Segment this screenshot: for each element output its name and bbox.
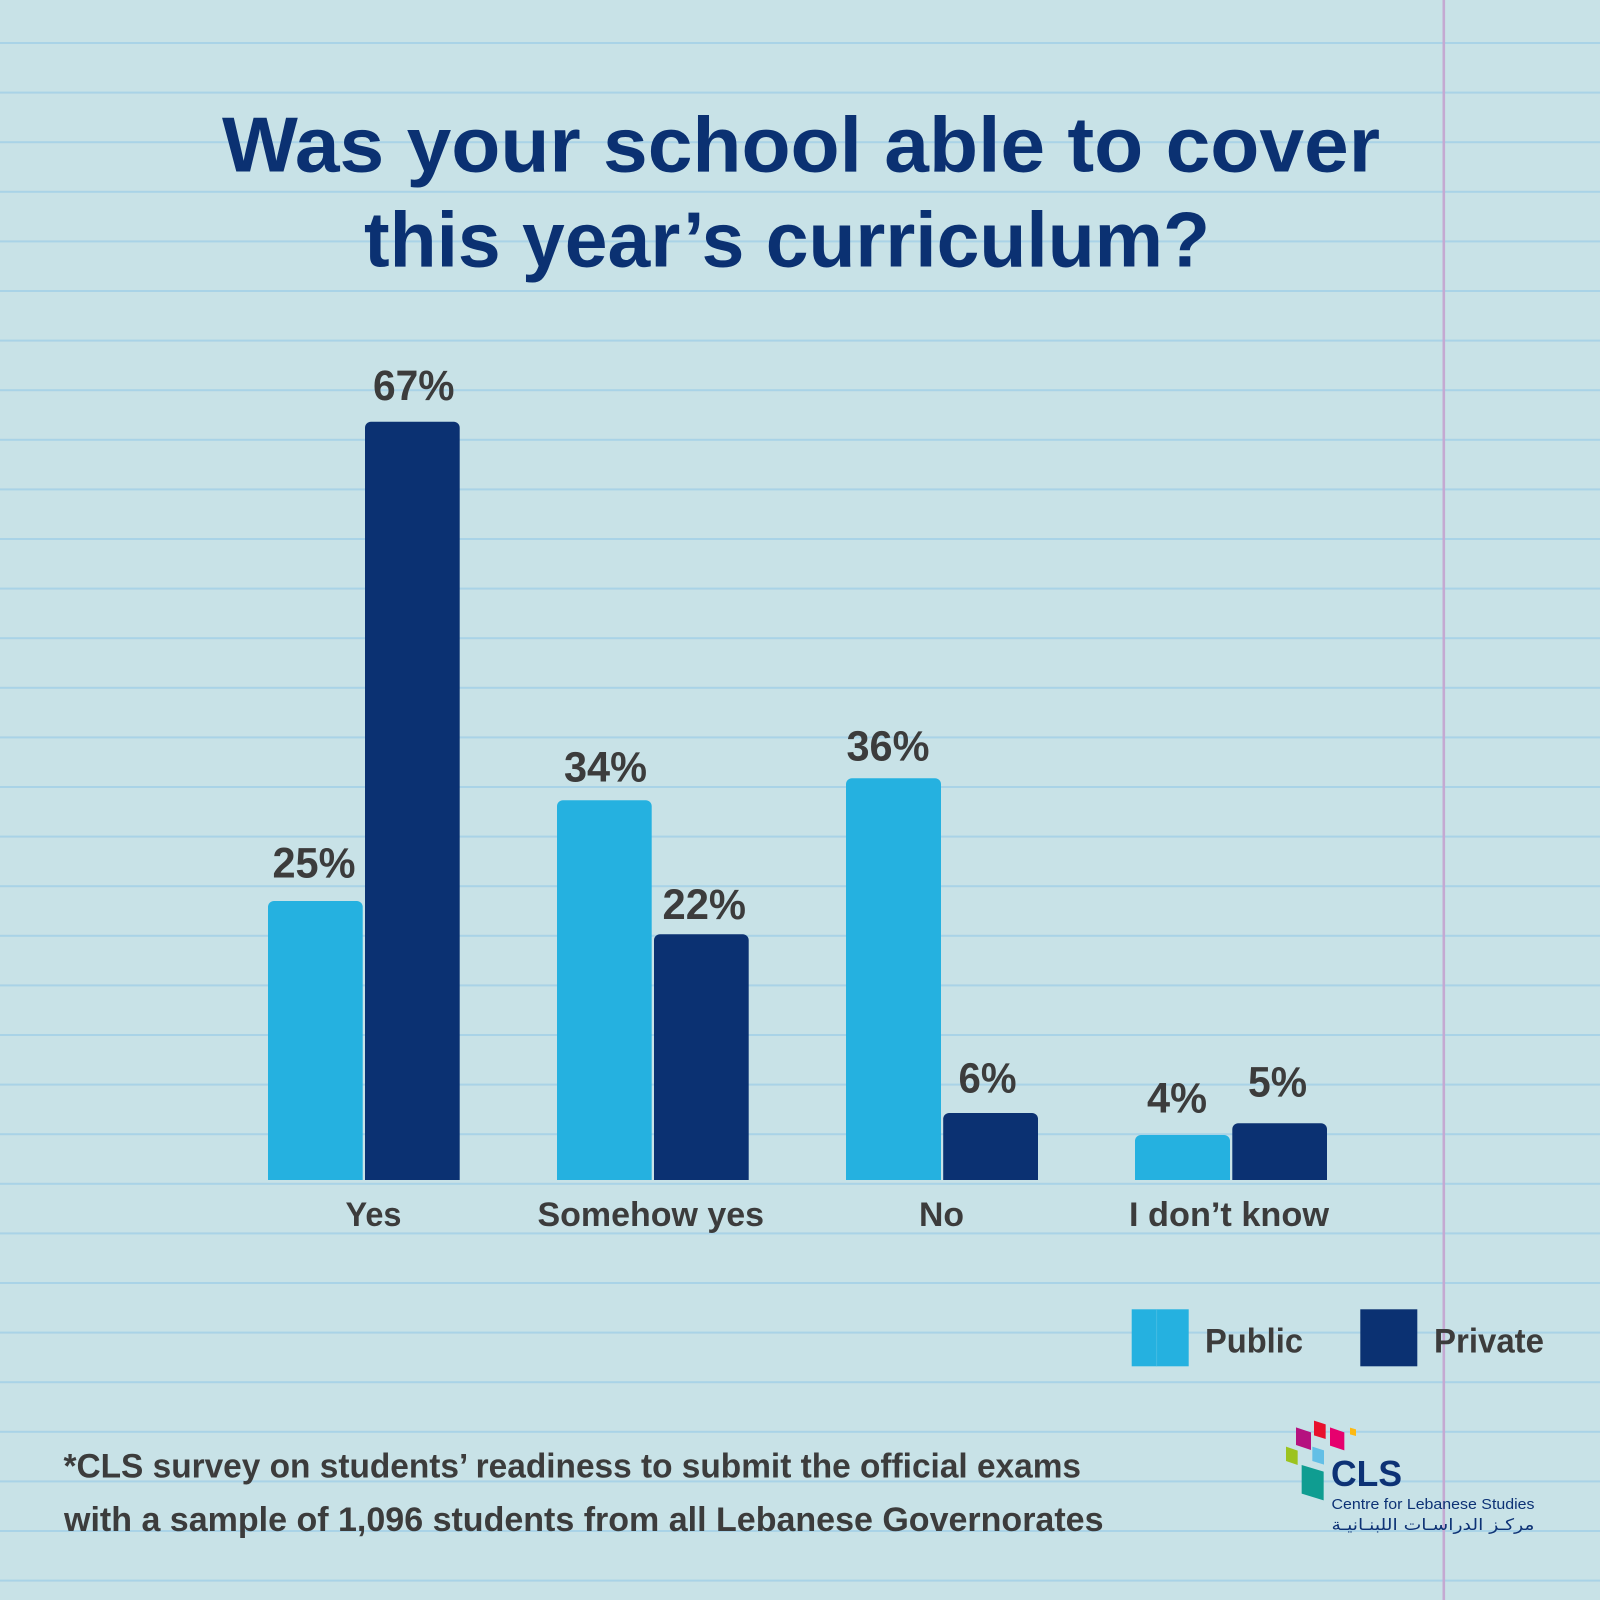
group: Somehow yes: Somehow yes [538,1196,764,1234]
legend: private [1360,1309,1544,1366]
logo text: Centre for Lebanese Studies [1332,1496,1534,1513]
group: I don't know [1129,1059,1330,1234]
logo text: مركـز الدراسـات اللبنـانيـة [1332,1515,1534,1535]
footnote: *CLS survey on students’ readiness to submit the official exams [64,1448,1081,1486]
group: Yes [268,362,460,1234]
group: Yes: 25% [272,840,356,888]
logo text [1331,1453,1534,1535]
group: Yes: Yes [346,1196,402,1234]
title: this year’s curriculum? [364,196,1210,284]
group: No [846,723,1038,1234]
logo text: CLS [1331,1453,1402,1494]
group: Yes: 67% [373,362,454,410]
legend: private: Private [1434,1322,1544,1360]
group: I don't know: 5% [1248,1059,1307,1107]
bar chart [268,362,1330,1234]
group: I don't know: 4% [1147,1075,1207,1123]
footnote: with a sample of 1,096 students from all Lebanese Governorates [63,1501,1103,1539]
legend: public [1132,1309,1303,1366]
group: No: 36% [846,723,930,771]
footnote [63,1448,1103,1539]
title: Was your school able to cover [222,101,1380,189]
group: Somehow yes [538,743,764,1234]
group: Somehow yes: 22% [662,881,746,929]
logo mark [1286,1421,1356,1500]
group: No: No [919,1196,964,1234]
legend: public: Public [1205,1322,1303,1360]
group: I don't know: I don’t know [1129,1196,1330,1234]
group: No: 6% [958,1054,1016,1102]
group: Somehow yes: 34% [564,743,647,791]
legend [1132,1309,1544,1366]
title [222,101,1380,284]
logo: CLS [1286,1421,1534,1535]
